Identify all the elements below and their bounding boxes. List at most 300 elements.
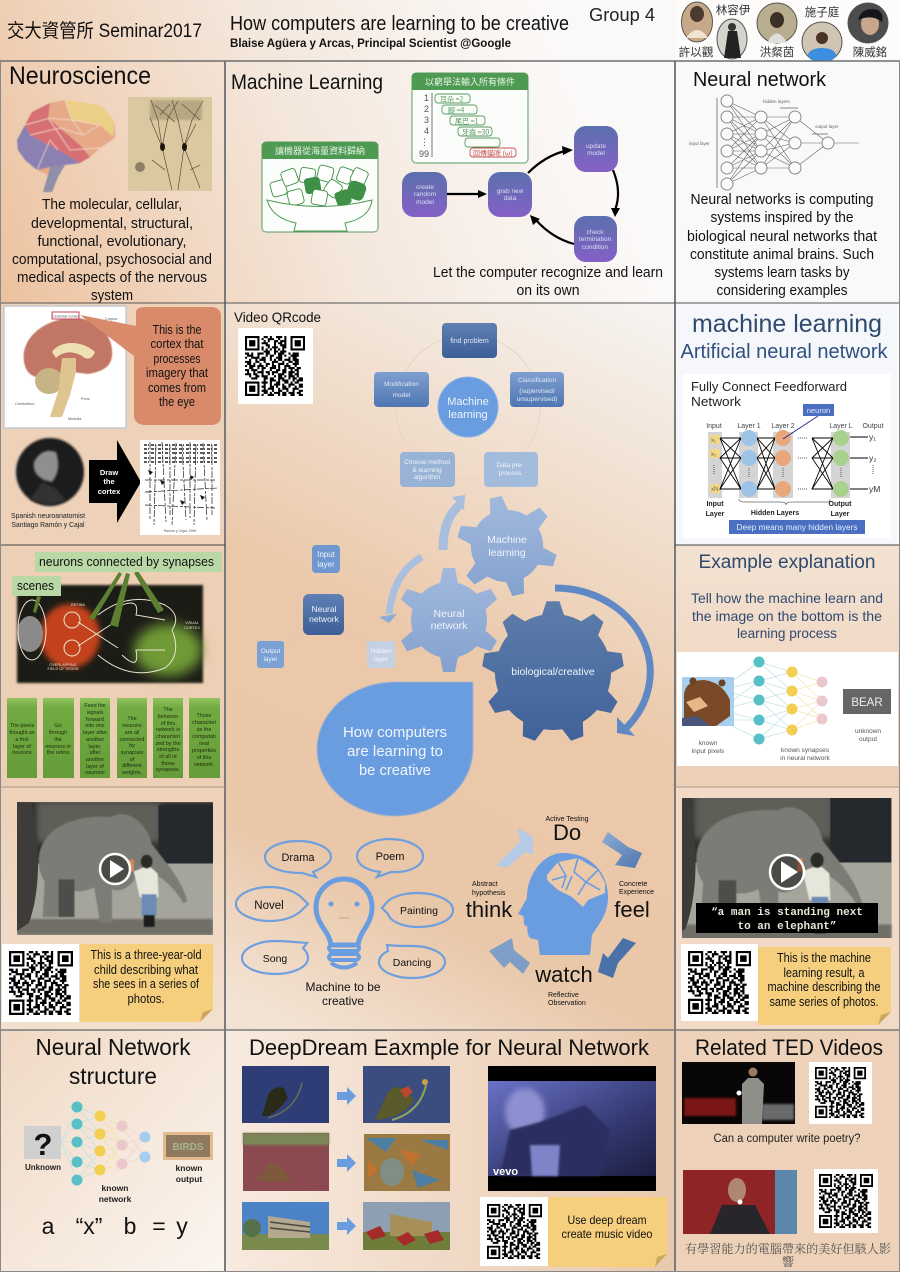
bubble: drama xyxy=(265,841,331,877)
step 5: of this xyxy=(161,721,175,727)
video still: music video xyxy=(488,1066,656,1191)
diagram: feedforward network: xN xyxy=(711,487,718,493)
image: Ramón y Cajal portrait: Santiago Ramón y Cajal xyxy=(12,520,85,529)
card: rule input: 4 xyxy=(424,126,429,136)
arrow: draw the cortex: the xyxy=(103,477,115,486)
diagram: feedforward network: x₁ xyxy=(711,438,716,444)
video still with caption xyxy=(672,794,891,942)
diagram: layered network xyxy=(689,95,859,190)
diagram: network with unknown input: known xyxy=(102,1183,128,1193)
image: brain anatomy chart: Medulla xyxy=(68,417,82,421)
label: neurons connected by synapses: neurons connected by synapses xyxy=(39,554,214,569)
diagram: network with unknown input: known xyxy=(176,1163,202,1173)
step 4: are all xyxy=(125,730,139,736)
bubble: novel: Novel xyxy=(254,900,284,912)
callout: cortex explanation: cortex that xyxy=(150,337,204,351)
QR code xyxy=(809,1062,872,1124)
bubble: painting: Painting xyxy=(400,905,438,917)
step 4: neurons xyxy=(122,723,142,729)
step 4: connected xyxy=(120,737,144,743)
panel: central concept map xyxy=(225,303,675,1030)
step 3 xyxy=(80,698,110,778)
diagram: feedforward network: Input xyxy=(706,501,724,508)
flow: check termination condition: condition xyxy=(582,244,608,251)
diagram: feedforward network: Hidden Layers xyxy=(751,510,799,517)
description text: developmental, structural, xyxy=(31,216,193,232)
step 2: through xyxy=(49,730,67,736)
heading: Machine Learning xyxy=(231,71,383,94)
description text: The molecular, cellular, xyxy=(42,197,182,213)
portrait 4 xyxy=(802,5,842,62)
step 5: synapses. xyxy=(156,767,180,773)
equation: y xyxy=(176,1213,188,1239)
step 3: into one xyxy=(85,723,105,729)
diagram: bear classification network: input pixels xyxy=(692,748,725,755)
image: Ramón y Cajal portrait: Spanish neuroanatomist xyxy=(11,511,86,520)
description text: system xyxy=(91,288,133,304)
node: neural network: network xyxy=(309,614,340,624)
banner: deep means many hidden layers xyxy=(729,520,865,534)
image: bird dream xyxy=(363,1066,450,1123)
label: scenes xyxy=(12,576,61,596)
arrow xyxy=(337,1087,356,1105)
flow: grab new data: data xyxy=(504,195,517,202)
cards: process steps xyxy=(7,698,220,778)
note xyxy=(758,947,891,1025)
step 3: signals xyxy=(87,710,104,716)
label: feel xyxy=(614,881,654,922)
heading: machine learning xyxy=(692,310,882,338)
flow: check termination condition: termination xyxy=(579,236,611,243)
label: watch: Observation xyxy=(548,1000,586,1007)
gear: machine learning xyxy=(457,496,557,596)
diagram: layered network: hidden layers xyxy=(763,99,791,104)
caption: Let the computer recognize and learn xyxy=(433,265,663,281)
step 1: layer of xyxy=(13,744,31,750)
step: data pre-process: process xyxy=(499,470,522,477)
diagram: feedforward network: Output xyxy=(862,423,884,430)
step 5: behavior xyxy=(158,714,179,720)
step 5 xyxy=(153,698,183,778)
card: rule input: 2 xyxy=(424,104,429,114)
description text: functional, evolutionary, xyxy=(38,234,186,250)
gear: biological creative: biological/creative xyxy=(511,666,595,678)
step 2: the xyxy=(54,737,62,743)
step 5: zed by the xyxy=(156,741,180,747)
portrait 2: 林容伊 xyxy=(716,3,751,17)
panel: visual pathway xyxy=(0,545,225,787)
image: visual cortex: FIELD OF VISION xyxy=(47,667,79,671)
portrait 5: 陳威銘 xyxy=(853,45,887,59)
flow: check termination condition xyxy=(574,216,617,262)
label: do: Active Testing xyxy=(545,816,589,823)
callout: cortex explanation: the eye xyxy=(159,395,195,409)
video still: elephant and child xyxy=(17,802,213,935)
gear: neural network xyxy=(401,568,497,672)
step 5: those xyxy=(161,761,175,767)
image: rock dream xyxy=(364,1134,450,1191)
portrait 3: 洪粲茵 xyxy=(760,45,794,59)
label: watch: Reflective xyxy=(548,992,579,999)
step 3: after xyxy=(90,750,101,756)
image: visual cortex: CORTEX xyxy=(184,626,200,630)
panel: machine learning xyxy=(225,61,675,303)
arrows: green pointers xyxy=(33,571,164,627)
node: neural network: Neural xyxy=(311,604,337,614)
diagram: bear classification network: unknown xyxy=(855,728,881,735)
step 3: neurons xyxy=(85,770,105,776)
node: input layer xyxy=(312,545,340,573)
description text: computational, psychosocial and xyxy=(12,252,212,268)
diagram: layered network: input layer xyxy=(689,141,710,146)
caption: machine to be creative: Machine to be xyxy=(306,980,381,994)
step: choose method xyxy=(400,452,455,487)
flow: check termination condition: check xyxy=(587,229,604,236)
caption: Chinese title: 響 xyxy=(782,1253,794,1270)
diagram: network with unknown input: ? xyxy=(34,1127,52,1162)
card: rule input xyxy=(412,73,528,163)
heading: Neural network xyxy=(693,69,827,91)
teardrop: central message xyxy=(317,682,473,816)
image: visual cortex xyxy=(17,585,203,683)
image: Ramón y Cajal portrait xyxy=(11,438,86,529)
node: neural network xyxy=(303,594,344,635)
image: building original xyxy=(242,1202,329,1250)
arrow: biological big curve xyxy=(555,588,650,736)
note: create music video xyxy=(562,1227,653,1241)
panel: neural network xyxy=(675,61,900,303)
panel: header xyxy=(0,0,900,62)
bubble: song xyxy=(242,941,308,974)
heading xyxy=(36,1034,191,1089)
video still with caption: “a man is standing next xyxy=(711,907,863,919)
arrow: draw the cortex: Draw xyxy=(100,468,118,477)
diagram: network with unknown input: Unknown xyxy=(25,1163,61,1172)
QR code xyxy=(480,1197,548,1266)
step: find problem xyxy=(442,323,497,358)
node: output layer: layer xyxy=(263,656,278,663)
hub: machine learning: Machine xyxy=(447,396,489,408)
step 6 xyxy=(189,698,220,778)
label: video QR: Video QRcode xyxy=(234,309,321,325)
label: feel: Concrete xyxy=(619,881,648,888)
image: brain anatomy chart: Cerebellum xyxy=(15,402,34,406)
node: hidden layer: layer xyxy=(374,656,389,663)
flow: update model: update xyxy=(586,143,606,150)
step 3: layer after xyxy=(83,730,107,736)
arrow xyxy=(337,1154,356,1172)
step 6: onal xyxy=(199,741,209,747)
diagram: feedforward network: yM xyxy=(869,484,880,494)
step 6: computati xyxy=(192,734,216,740)
diagram: bear classification network: output xyxy=(859,736,877,743)
step: modification model: Modification xyxy=(384,381,419,388)
subheading: Artificial neural network xyxy=(680,341,888,363)
diagram: feedforward network: y₁ xyxy=(869,432,876,442)
step: choose method: & learning xyxy=(412,467,442,474)
diagram: feedforward network: Output xyxy=(829,501,852,508)
icon: head with brain xyxy=(518,853,608,955)
step 2: neurons in xyxy=(45,744,71,750)
description text: considering examples xyxy=(716,283,848,299)
hierarchy: neural network layers xyxy=(257,545,395,668)
step: modification model xyxy=(374,372,429,407)
label: scenes: scenes xyxy=(17,578,54,593)
heading: DeepDream Eaxmple for Neural Network xyxy=(249,1035,650,1060)
diagram: network with unknown input: BIRDS xyxy=(172,1142,204,1153)
card: rule input: 牙齒 =30 xyxy=(462,128,489,138)
arrow: gear to machine learning xyxy=(443,495,465,550)
label: think: Abstract xyxy=(472,881,498,888)
label: watch: watch xyxy=(534,962,593,987)
equation xyxy=(42,1213,188,1239)
description: learning process xyxy=(737,625,837,641)
arrow: feel to watch xyxy=(598,938,636,978)
teardrop: central message: How computers xyxy=(343,725,447,741)
heading: Neural Network xyxy=(36,1034,191,1060)
gear: machine learning: learning xyxy=(488,547,526,559)
step 3: Feed the xyxy=(84,703,106,709)
step: classification: Classification xyxy=(518,377,557,384)
step 3: forward xyxy=(86,717,104,723)
callout: cortex explanation: This is the xyxy=(152,323,202,337)
panel: neural network structure xyxy=(0,1030,225,1272)
arrow xyxy=(337,1217,356,1235)
image: building dream xyxy=(363,1202,450,1250)
panel: example explanation xyxy=(675,545,900,787)
flow: create random model: create xyxy=(416,184,434,191)
panel: machine describing photo xyxy=(672,787,900,1030)
step: data pre-process xyxy=(484,452,538,487)
image: bird original xyxy=(242,1066,329,1123)
node: input layer: layer xyxy=(317,560,335,569)
icon: polygon brain xyxy=(17,100,115,192)
heading: Neuroscience xyxy=(9,62,151,90)
panel: related TED videos xyxy=(675,1030,900,1272)
caption xyxy=(433,265,663,299)
step: choose method: algorithm xyxy=(414,474,440,481)
arrow: watch to think xyxy=(489,938,530,974)
callout: cortex explanation: processes xyxy=(154,352,200,366)
description: the image on the bottom is the xyxy=(692,608,882,624)
video still: Blaise talk xyxy=(683,1170,797,1234)
note xyxy=(548,1197,667,1267)
gear: biological creative xyxy=(482,601,624,741)
description text: systems learn tasks by xyxy=(714,265,850,281)
diagram: bear classification network: known synapses xyxy=(781,747,830,754)
panel: neuroscience xyxy=(0,61,225,304)
label: watch xyxy=(534,962,593,1007)
step 3: another xyxy=(86,737,104,743)
step 5: strengths xyxy=(157,747,179,753)
bubble: novel xyxy=(236,887,308,921)
diagram: feedforward network: Layer L xyxy=(829,423,853,430)
diagram: feedforward network: Layer xyxy=(831,511,850,518)
heading: Example explanation xyxy=(698,552,876,573)
diagram: feedforward network: Layer 1 xyxy=(737,423,761,430)
talk title: How computers are learning to be creative xyxy=(230,13,569,35)
caption: on its own xyxy=(516,283,580,299)
step 6: properties xyxy=(192,748,216,754)
step 4 xyxy=(117,698,147,778)
diagram: bear classification network xyxy=(677,652,898,766)
step 2: Go xyxy=(54,723,62,729)
description text xyxy=(687,192,877,299)
caption: Chinese title xyxy=(685,1240,891,1270)
arrow: draw the cortex xyxy=(89,440,141,523)
note: photos. xyxy=(128,992,164,1006)
step: find problem: find problem xyxy=(450,338,489,345)
description xyxy=(691,590,883,641)
bubble: painting xyxy=(382,893,453,927)
equation: = xyxy=(152,1213,166,1239)
card: rule input: 腳 =4 xyxy=(448,106,464,116)
image: rock original xyxy=(243,1133,329,1191)
bubble: dancing: Dancing xyxy=(393,957,431,969)
description text: systems inspired by the xyxy=(710,210,854,226)
node: hidden layer xyxy=(367,641,395,668)
step 3: another xyxy=(86,757,104,763)
description text: constitute animal brains. Such xyxy=(690,247,874,263)
step 3: layer, xyxy=(89,744,102,750)
flow: grab new data xyxy=(488,172,532,217)
step 4: of xyxy=(130,757,135,763)
diagram: feedforward network: x₂ xyxy=(711,452,717,458)
description text: Neural networks is computing xyxy=(690,192,874,208)
team portraits xyxy=(679,2,888,62)
step 6: Those xyxy=(197,713,211,719)
QR code xyxy=(681,944,758,1021)
equation: b xyxy=(124,1213,136,1239)
note: Use deep dream xyxy=(568,1213,647,1227)
note: machine describing the xyxy=(768,980,881,994)
diagram: feedforward network: Layer 2 xyxy=(771,423,795,430)
speaker: Blaise Agüera y Arcas, Principal Scientist @Google xyxy=(230,36,511,50)
diagram: network with unknown input xyxy=(24,1102,212,1204)
gear: neural network: Neural xyxy=(434,608,464,620)
caption: machine to be creative: creative xyxy=(322,994,364,1008)
node: hidden layer: Hidden xyxy=(371,648,392,655)
label: think: think xyxy=(466,897,513,922)
step 1: The pixels xyxy=(10,723,35,729)
seminar label: 交大資管所 Seminar2017 xyxy=(7,20,202,42)
teardrop: central message: be creative xyxy=(359,763,431,779)
image: neuron drawing xyxy=(128,97,212,191)
label: feel: feel xyxy=(614,897,650,922)
step 1 xyxy=(7,698,37,778)
label: neuron: neuron xyxy=(807,406,830,415)
QR code xyxy=(814,1169,878,1233)
step: classification: (supervised/ xyxy=(519,388,555,395)
step 6: network. xyxy=(194,762,214,768)
arrow: think to do xyxy=(496,828,533,868)
diagram: feedforward network: Fully Connect Feedforward xyxy=(691,379,847,394)
diagram: feedforward network xyxy=(683,374,891,538)
arrow: machine learning to neural network xyxy=(379,557,422,623)
step 4: by xyxy=(129,743,135,749)
step 5: The xyxy=(163,707,173,713)
panel: machine learning ANN xyxy=(675,303,900,545)
flow: create random model: model xyxy=(416,199,434,206)
step: classification xyxy=(510,372,564,407)
flow: grab new data: grab new xyxy=(497,188,524,195)
portrait 1: 許以觀 xyxy=(679,46,714,59)
bubble: song: Song xyxy=(263,953,287,965)
bubble: poem xyxy=(357,839,423,877)
video still: music video: vevo xyxy=(493,1166,518,1178)
hub: machine learning: learning xyxy=(448,409,488,421)
step 6: characteri xyxy=(192,720,216,726)
label: feel: Experience xyxy=(619,889,654,896)
bubble: poem: Poem xyxy=(376,851,404,863)
portrait 1 xyxy=(679,2,714,59)
step 1: neurons xyxy=(12,750,32,756)
image: cortex drawing xyxy=(140,440,220,535)
bubble: dancing xyxy=(379,945,445,978)
image: visual cortex: OVERLAPPING xyxy=(49,663,77,667)
card: rule input: 1 xyxy=(424,93,429,103)
image: brain anatomy chart: Pons xyxy=(81,397,90,401)
step 5: of all of xyxy=(159,754,177,760)
description text: biological neural networks that xyxy=(687,229,877,245)
card: rule input: 耳朵 =2 xyxy=(440,94,463,104)
caption: machine to be creative xyxy=(306,980,381,1008)
card: data induction xyxy=(262,142,378,232)
note xyxy=(80,944,213,1022)
equation: a xyxy=(42,1213,55,1239)
teardrop: central message: are learning to xyxy=(347,744,443,760)
diagram: feedforward network: y₂ xyxy=(869,453,877,463)
panel: cortex xyxy=(0,303,225,545)
note: she sees in a series of xyxy=(93,977,199,991)
video still with caption: to an elephant” xyxy=(737,921,837,933)
card: rule input: ⋮ xyxy=(420,137,429,147)
banner: deep means many hidden layers: Deep means many hidden layers xyxy=(736,522,858,532)
step 1: thought as xyxy=(9,730,35,736)
step 4: different xyxy=(122,763,142,769)
image: cortex drawing: Ramón y Cajal, 1900 xyxy=(164,529,196,533)
arrow: do to feel xyxy=(602,832,642,868)
portrait 2 xyxy=(716,3,751,59)
step: data pre-process: Data pre- xyxy=(496,462,524,469)
step 6: of this xyxy=(197,755,211,761)
description: Tell how the machine learn and xyxy=(691,590,883,606)
step 5: characteri xyxy=(156,734,180,740)
diagram: network with unknown input: output xyxy=(176,1174,202,1184)
portrait 5 xyxy=(848,3,888,59)
diagram: bear classification network: BEAR xyxy=(851,697,883,709)
step 1: a first xyxy=(15,737,29,743)
heading: structure xyxy=(69,1063,157,1089)
image: brain anatomy chart: Corpus xyxy=(105,317,117,321)
bubble: drama: Drama xyxy=(281,852,315,864)
callout: cortex explanation: imagery that xyxy=(146,366,208,380)
card: data induction: 讓機器從海量資料歸納 xyxy=(275,144,365,157)
card: rule input: 以窮舉法輸入所有條件 xyxy=(425,75,515,88)
group label: Group 4 xyxy=(589,5,655,25)
image: brain anatomy chart: Cerebral cortex xyxy=(52,314,79,318)
diagram: feedforward network: Network xyxy=(691,394,742,409)
flow: create random model xyxy=(402,172,447,217)
step 6: ze the xyxy=(197,727,211,733)
callout: cortex explanation xyxy=(80,307,221,425)
node: output layer: Output xyxy=(261,648,280,655)
note: same series of photos. xyxy=(770,995,878,1009)
label: do xyxy=(545,816,589,845)
portrait 3 xyxy=(757,3,797,59)
arrow: draw the cortex: cortex xyxy=(98,487,121,496)
card: rule input: 99 xyxy=(419,149,429,159)
